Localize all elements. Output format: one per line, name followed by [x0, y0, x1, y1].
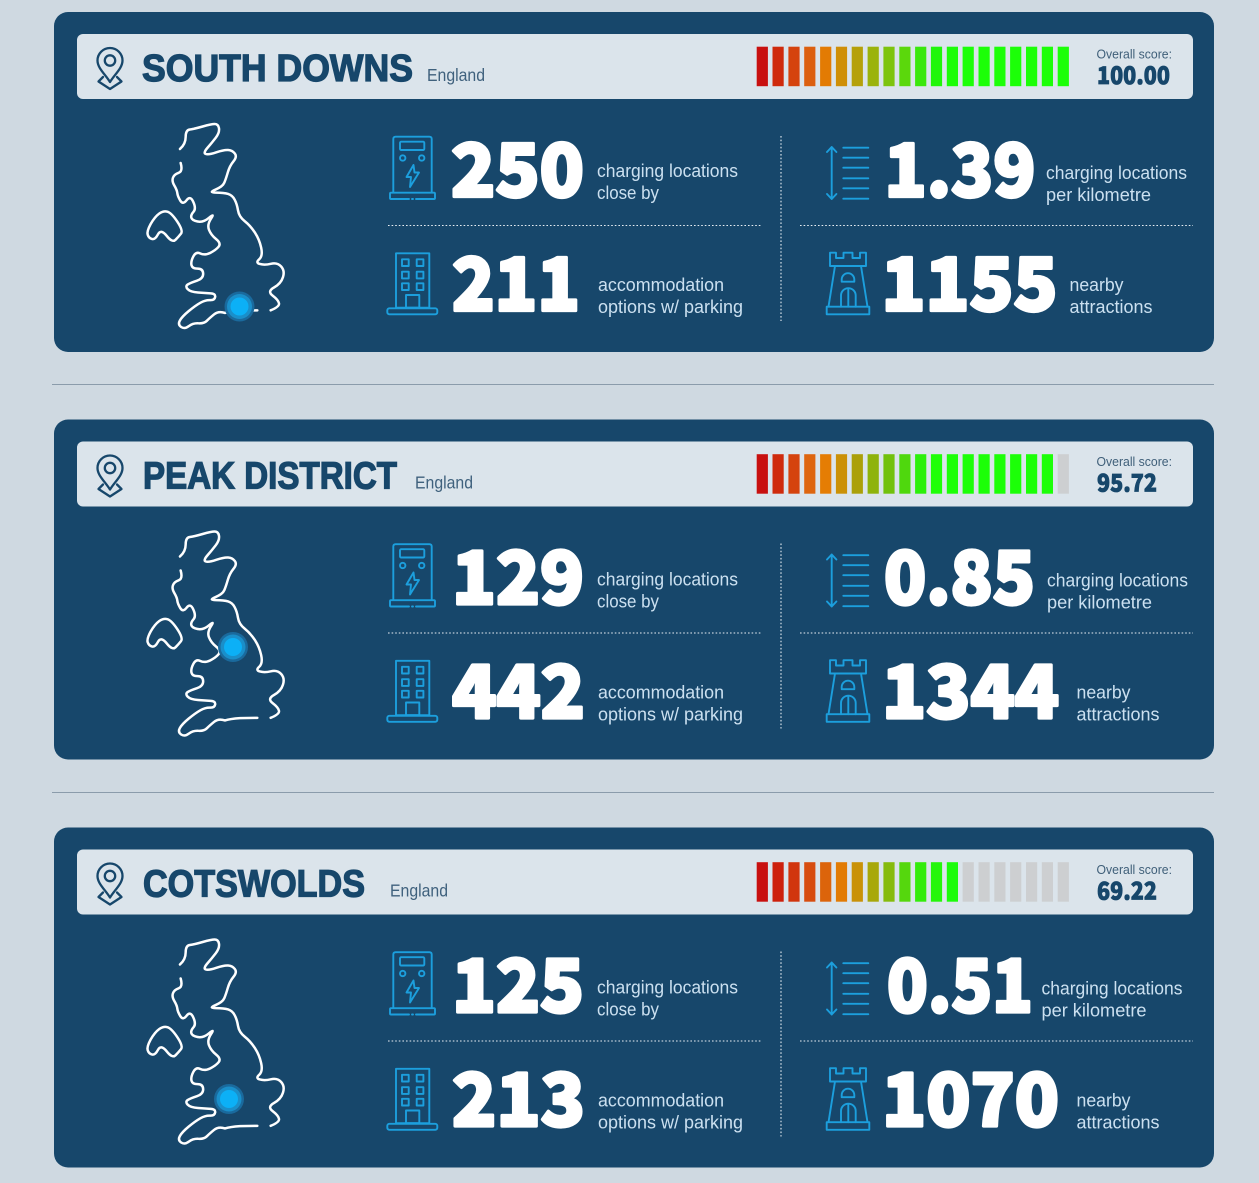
icon: castle tower: [827, 660, 869, 722]
UK map with location marker: [147, 531, 284, 735]
icon: location pin: [98, 456, 122, 496]
dotted dividers: [388, 952, 1193, 1136]
stat: accommodation options: 442: [452, 634, 585, 740]
dotted dividers: [388, 136, 1193, 321]
stat: nearby attractions: nearby: [1076, 682, 1131, 702]
stat: nearby attractions: nearby: [1076, 1090, 1131, 1110]
stat: charging locations close by: 129: [452, 520, 584, 626]
heading: Cotswolds: COTSWOLDS: [143, 864, 365, 906]
stat: nearby attractions: [882, 226, 1152, 332]
icon: location pin: [98, 48, 122, 89]
stat: nearby attractions: [882, 1042, 1160, 1148]
icon: hotel building: [387, 661, 437, 722]
dotted dividers: [388, 544, 1193, 728]
region label: England: [390, 880, 448, 900]
stat: nearby attractions: [882, 634, 1160, 740]
stat: nearby attractions: attractions: [1076, 704, 1160, 724]
overall score label: Overall score:: [1096, 46, 1172, 62]
stat: accommodation options: [452, 1042, 743, 1148]
icon: castle tower: [827, 1068, 869, 1130]
icon: hotel building: [387, 1069, 437, 1130]
stat: accommodation options: accommodation: [598, 274, 724, 295]
UK map with location marker: [147, 124, 284, 328]
stat: accommodation options: 213: [452, 1042, 585, 1148]
stat: nearby attractions: 1155: [882, 226, 1058, 332]
icon: charging station: [390, 137, 435, 199]
stat: charging locations per kilometre: per kilometre: [1046, 184, 1151, 205]
overall score value: 100.00: [1097, 56, 1170, 91]
overall score value: 69.22: [1097, 872, 1157, 906]
stat: nearby attractions: attractions: [1076, 1112, 1160, 1132]
stat: accommodation options: [452, 634, 743, 740]
stat: charging locations per kilometre: [884, 112, 1187, 218]
panel: Cotswolds: [54, 828, 1214, 1168]
stat: accommodation options: accommodation: [598, 682, 724, 702]
stat: accommodation options: options w/ parking: [598, 1112, 743, 1132]
heading: Peak District: PEAK DISTRICT: [143, 456, 397, 498]
heading: South Downs: SOUTH DOWNS: [142, 48, 413, 90]
icon: hotel building: [387, 253, 437, 314]
stat: charging locations close by: 125: [452, 928, 584, 1034]
overall score label: Overall score:: [1096, 454, 1172, 469]
stat: charging locations per kilometre: [887, 928, 1182, 1034]
stat: accommodation options: accommodation: [598, 1090, 724, 1110]
stat: charging locations close by: charging locations: [597, 976, 738, 998]
stat: charging locations per kilometre: 0.51: [887, 928, 1033, 1034]
stat: nearby attractions: 1070: [882, 1042, 1059, 1148]
icon: charging station: [390, 544, 435, 606]
panel: Peak District: [54, 420, 1214, 760]
stat: nearby attractions: nearby: [1070, 274, 1124, 295]
icon: distance lines: [827, 962, 868, 1014]
stat: accommodation options: options w/ parking: [598, 704, 743, 724]
stat: charging locations close by: charging locations: [597, 568, 738, 590]
stat: nearby attractions: attractions: [1070, 296, 1152, 317]
stat: accommodation options: 211: [452, 226, 580, 332]
header bar: [77, 442, 1193, 506]
stat: charging locations close by: close by: [597, 590, 660, 612]
stat: accommodation options: [452, 226, 743, 332]
stat: charging locations per kilometre: charging locations: [1046, 162, 1187, 183]
stat: charging locations close by: [452, 928, 738, 1034]
stat: charging locations close by: charging locations: [597, 160, 738, 181]
icon: castle tower: [827, 253, 869, 314]
stat: charging locations per kilometre: per kilometre: [1047, 592, 1152, 612]
UK map with location marker: [147, 939, 284, 1143]
region label: England: [427, 65, 485, 85]
stat: charging locations per kilometre: 1.39: [884, 112, 1036, 218]
stat: charging locations per kilometre: [884, 520, 1188, 626]
stat: charging locations close by: [451, 112, 738, 218]
stat: charging locations close by: [452, 520, 738, 626]
icon: distance lines: [827, 554, 868, 606]
icon: distance lines: [827, 147, 868, 199]
score bar: 19 of 20 segments: [757, 454, 1069, 494]
overall score label: Overall score:: [1096, 862, 1172, 877]
panel: South Downs: [54, 12, 1214, 352]
header bar: [77, 850, 1193, 914]
stat: charging locations per kilometre: per kilometre: [1042, 1000, 1146, 1020]
stat: charging locations per kilometre: charging locations: [1047, 570, 1188, 590]
overall score value: 95.72: [1097, 464, 1157, 498]
stat: charging locations per kilometre: charging locations: [1042, 978, 1182, 998]
icon: charging station: [390, 952, 435, 1014]
score bar: 13 of 20 segments: [757, 862, 1069, 902]
stat: charging locations close by: close by: [597, 182, 660, 203]
stat: nearby attractions: 1344: [882, 634, 1059, 740]
stat: charging locations per kilometre: 0.85: [884, 520, 1035, 626]
region label: England: [415, 472, 473, 492]
header bar: [77, 34, 1193, 99]
icon: location pin: [98, 864, 122, 904]
stat: accommodation options: options w/ parking: [598, 296, 743, 317]
stat: charging locations close by: 250: [451, 112, 584, 218]
score bar: 20 of 20 segments: [757, 47, 1069, 86]
stat: charging locations close by: close by: [597, 998, 660, 1020]
